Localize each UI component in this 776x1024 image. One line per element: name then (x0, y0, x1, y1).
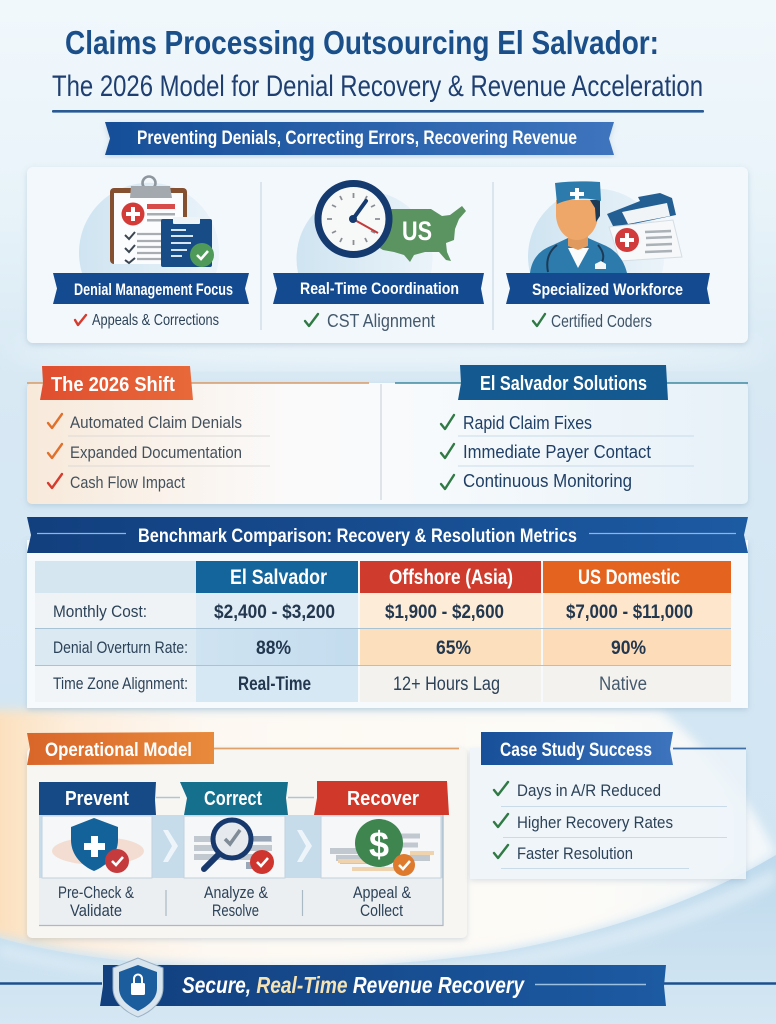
item: CST alignment: CST Alignment (327, 311, 435, 331)
list: case study results: Days in A/R Reduced (517, 781, 661, 800)
icon: dollar coin with check: $ (369, 824, 389, 865)
title: Claims Processing Outsourcing El Salvador: (65, 24, 659, 61)
captions: step descriptions: Validate (70, 901, 122, 920)
heading: El Salvador solutions: El Salvador Solutions (480, 373, 647, 395)
row: monthly cost: $7,000 - $11,000 (566, 602, 693, 623)
icon: medical worker and records (528, 181, 682, 273)
row: denial overturn rate: 65% (436, 638, 471, 659)
header: offshore Asia: Offshore (Asia) (389, 566, 513, 589)
subtitle banner: Preventing Denials, Correcting Errors, Recovering Revenue (137, 128, 577, 149)
list: shift items: Expanded Documentation (70, 443, 242, 462)
header: El Salvador (196, 561, 358, 593)
step: prevent: Prevent (65, 788, 129, 810)
step: prevent (39, 782, 156, 878)
item: appeals and corrections: Appeals & Corrections (92, 312, 219, 329)
heading: case study success: Case Study Success (500, 739, 652, 761)
list: shift items (48, 413, 270, 492)
header: offshore Asia (360, 561, 541, 593)
row: time zone alignment: Real-Time (238, 674, 311, 695)
row: time zone alignment: Time Zone Alignment: (53, 674, 188, 693)
ribbon: real-time coordination (273, 273, 484, 304)
header: US domestic: US Domestic (578, 566, 680, 589)
icon: clock and US map (296, 184, 466, 273)
row: monthly cost: $2,400 - $3,200 (214, 602, 335, 623)
table: metrics (35, 561, 731, 702)
footer text: Secure, Real-Time Revenue Recovery (182, 972, 525, 998)
list: case study results (494, 781, 727, 868)
icon: security shield with lock (113, 958, 163, 1017)
panel: case study success (470, 732, 746, 879)
list: case study results: Faster Resolution (517, 844, 633, 863)
list: solution items: Rapid Claim Fixes (463, 413, 592, 433)
heading: benchmark comparison: Benchmark Comparison: Recovery & Resolution Metrics (138, 526, 577, 547)
row: denial overturn rate: 88% (256, 638, 291, 659)
panel: key pillars (27, 167, 748, 343)
icon: clipboard with checklist (79, 176, 219, 273)
row: monthly cost: $1,900 - $2,600 (385, 602, 504, 623)
heading: operational model (27, 732, 214, 765)
heading: the 2026 shift: The 2026 Shift (51, 374, 175, 396)
header: US domestic (543, 561, 731, 593)
row: denial overturn rate (53, 638, 646, 659)
captions: step descriptions: Appeal & (353, 883, 412, 902)
row: time zone alignment: Native (599, 674, 647, 695)
icon: shield with plus (52, 818, 144, 873)
row: denial overturn rate: 90% (611, 638, 646, 659)
step: recover (314, 781, 449, 878)
row: time zone alignment: 12+ Hours Lag (393, 674, 500, 695)
heading: operational model: Operational Model (45, 739, 192, 761)
ribbon: denial management focus: Denial Management Focus (74, 280, 233, 299)
captions: step descriptions: Pre-Check & (58, 883, 135, 902)
heading: the 2026 shift (40, 366, 193, 400)
arrow: prevent to correct (163, 830, 178, 862)
header: El Salvador: El Salvador (230, 566, 327, 589)
heading: case study success (481, 732, 673, 765)
arrow: correct to recover (297, 830, 312, 862)
subtitle banner (105, 122, 614, 155)
panel: shift and solutions (27, 365, 748, 504)
list: solution items: Immediate Payer Contact (463, 442, 651, 462)
captions: step descriptions: Analyze & (204, 883, 269, 902)
step: correct: Correct (204, 788, 262, 810)
list: shift items: Automated Claim Denials (70, 413, 242, 432)
ribbon: denial management focus (53, 273, 249, 304)
captions: step descriptions: Collect (360, 901, 403, 920)
row: monthly cost: Monthly Cost: (53, 602, 147, 621)
row: denial overturn rate: Denial Overturn Rate: (53, 638, 188, 657)
title (52, 24, 704, 113)
step: correct (180, 782, 288, 878)
list: solution items: Continuous Monitoring (463, 471, 632, 491)
list: shift items: Cash Flow Impact (70, 473, 185, 492)
panel: operational model (27, 732, 467, 938)
list: solution items (441, 413, 694, 491)
row: time zone alignment (53, 674, 647, 695)
icon: clock and US map: US (402, 216, 432, 246)
row: monthly cost (53, 602, 693, 623)
captions: step descriptions: Resolve (212, 901, 259, 920)
ribbon: specialized workforce (506, 273, 710, 304)
icon: magnifier with check (194, 820, 274, 874)
heading: El Salvador solutions (458, 365, 668, 400)
footer banner (0, 958, 776, 1017)
captions: step descriptions (58, 883, 412, 920)
ribbon: specialized workforce: Specialized Workforce (532, 280, 683, 299)
panel: benchmark comparison (27, 517, 748, 708)
step: recover: Recover (347, 788, 419, 810)
ribbon: real-time coordination: Real-Time Coordination (300, 279, 459, 298)
list: case study results: Higher Recovery Rates (517, 813, 673, 832)
heading: benchmark comparison (27, 517, 748, 553)
item: certified coders: Certified Coders (551, 311, 652, 331)
